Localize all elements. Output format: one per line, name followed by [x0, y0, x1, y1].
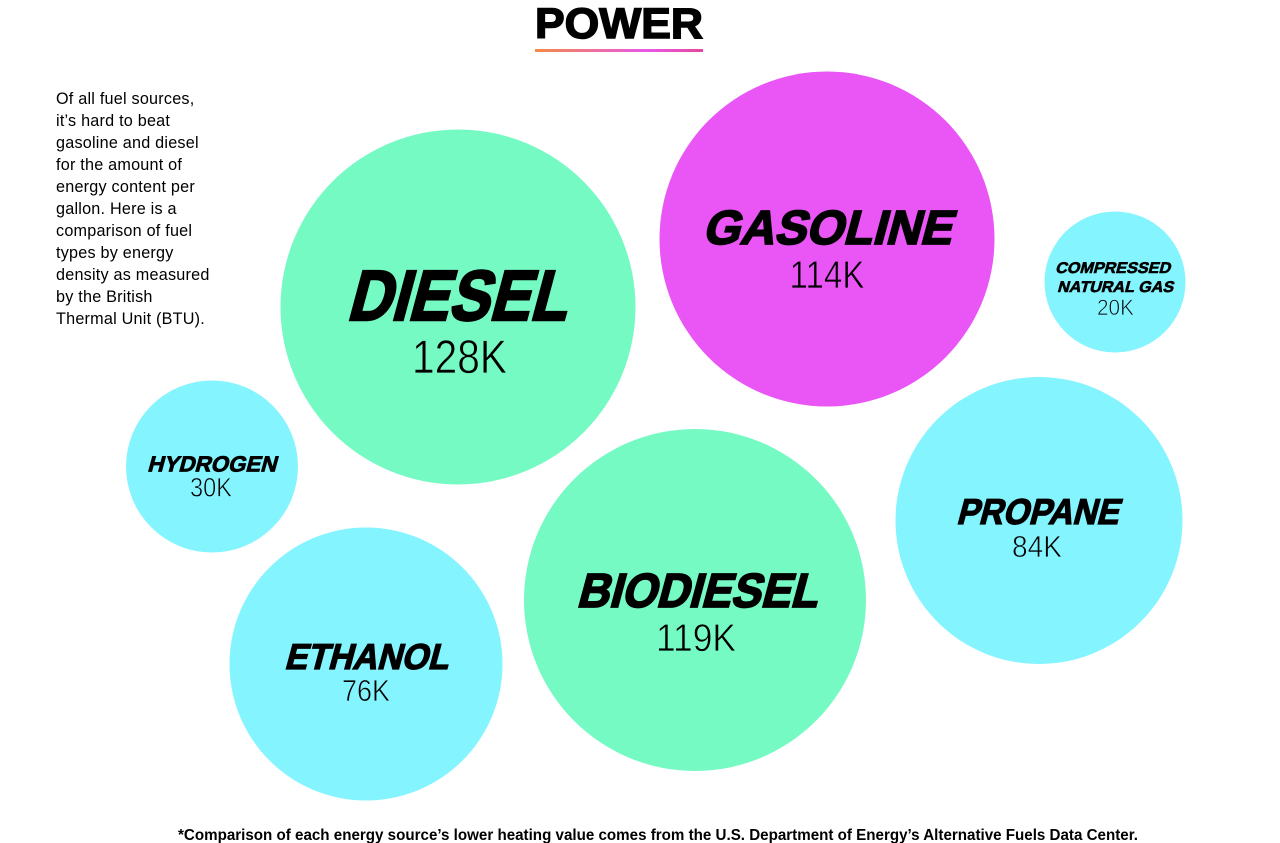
bubble: gasoline: GASOLINE — [699, 202, 962, 255]
intro text block: it’s hard to beat — [56, 112, 170, 130]
bubble: biodiesel: BIODIESEL — [573, 565, 828, 618]
bubble: diesel: 128K — [412, 330, 507, 383]
bubble: hydrogen: 30K — [190, 472, 232, 502]
bubble: propane — [896, 377, 1182, 664]
bubble: compressed natural gas — [1044, 212, 1186, 352]
bubble: ethanol — [230, 528, 502, 800]
bubble: biodiesel — [524, 429, 866, 771]
intro text block: Of all fuel sources, — [56, 90, 194, 108]
title: POWER — [535, 1, 703, 48]
bubble: propane: PROPANE — [954, 492, 1127, 532]
intro text block: types by energy — [56, 244, 174, 262]
bubble: compressed natural gas: NATURAL GAS — [1056, 279, 1176, 296]
intro text block: comparison of fuel — [56, 222, 192, 240]
bubble: ethanol: 76K — [342, 673, 390, 708]
bubble: ethanol: ETHANOL — [282, 637, 457, 677]
intro text block: for the amount of — [56, 156, 182, 174]
intro text block: density as measured — [56, 266, 210, 284]
bubble: hydrogen: HYDROGEN — [146, 452, 281, 476]
bubble: diesel — [280, 130, 636, 484]
intro text block: by the British — [56, 288, 153, 306]
intro text block: gasoline and diesel — [56, 134, 199, 152]
bubble: propane: 84K — [1012, 529, 1062, 564]
bubble: hydrogen — [126, 380, 298, 552]
intro text block: gallon. Here is a — [56, 200, 177, 218]
intro text block: Thermal Unit (BTU). — [56, 310, 205, 328]
bubble: gasoline: 114K — [790, 254, 865, 297]
bubble: gasoline — [660, 72, 994, 406]
intro text block: energy content per — [56, 178, 195, 196]
intro text block — [56, 90, 210, 328]
bubble: diesel: DIESEL — [342, 257, 583, 336]
bubble: compressed natural gas: COMPRESSED — [1054, 260, 1173, 277]
bubble: compressed natural gas: 20K — [1097, 295, 1134, 320]
bubble: biodiesel: 119K — [656, 617, 736, 660]
